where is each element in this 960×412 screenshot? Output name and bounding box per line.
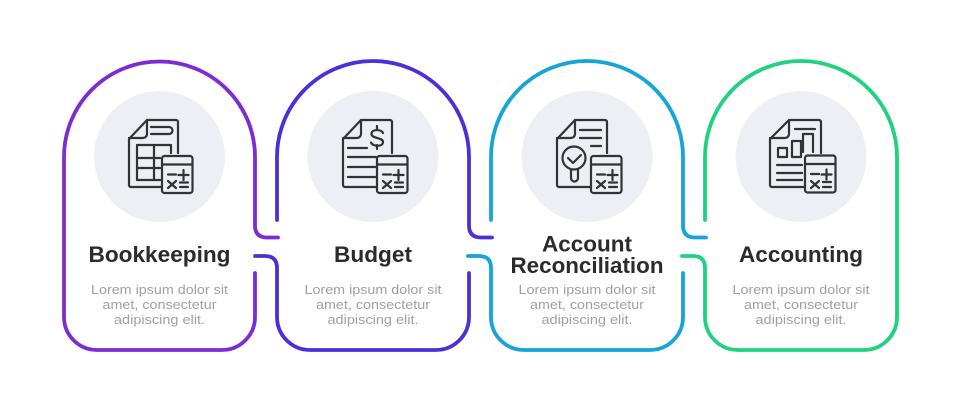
description: bookkeeping: adipiscing elit. (114, 313, 205, 327)
outline: bookkeeping (64, 62, 278, 350)
heading: accounting: Accounting (739, 242, 863, 267)
description: accounting (732, 283, 870, 327)
description: bookkeeping: Lorem ipsum dolor sit (91, 283, 229, 297)
description: account reconciliation: Lorem ipsum dolor sit (518, 283, 656, 297)
heading: bookkeeping: Bookkeeping (88, 242, 230, 267)
description: accounting: amet, consectetur (744, 298, 858, 312)
description: account reconciliation (518, 283, 656, 327)
description: accounting: Lorem ipsum dolor sit (732, 283, 870, 297)
heading: budget: Budget (334, 242, 413, 267)
description: budget: amet, consectetur (316, 298, 430, 312)
icon: invoice with dollar and calculator (343, 120, 408, 193)
heading: account reconciliation: Account (542, 232, 633, 256)
icon circle: budget (308, 91, 438, 222)
icon circle: accounting (736, 91, 866, 222)
panel: bookkeeping (64, 62, 278, 350)
icon circle: bookkeeping (94, 91, 225, 222)
panel: accounting (682, 61, 897, 350)
description: budget: Lorem ipsum dolor sit (304, 283, 442, 297)
outline: account reconciliation (468, 61, 706, 350)
outline: budget (255, 61, 492, 350)
description: bookkeeping (91, 283, 229, 327)
description: bookkeeping: amet, consectetur (102, 298, 216, 312)
description: account reconciliation: adipiscing elit. (542, 313, 632, 327)
description: budget (304, 283, 442, 327)
icon: report with bar chart and calculator (770, 120, 836, 192)
icon circle: account reconciliation (522, 91, 652, 222)
heading: account reconciliation: Reconciliation (510, 253, 664, 278)
panel: budget (255, 61, 492, 350)
panel: account reconciliation (468, 61, 706, 350)
icon: spreadsheet and calculator (129, 120, 192, 193)
heading: account reconciliation (510, 232, 664, 278)
description: accounting: adipiscing elit. (756, 313, 846, 327)
icon: document with magnifier and calculator (557, 120, 622, 193)
description: budget: adipiscing elit. (328, 313, 418, 327)
description: account reconciliation: amet, consectetur (530, 298, 644, 312)
outline: accounting (682, 61, 897, 350)
